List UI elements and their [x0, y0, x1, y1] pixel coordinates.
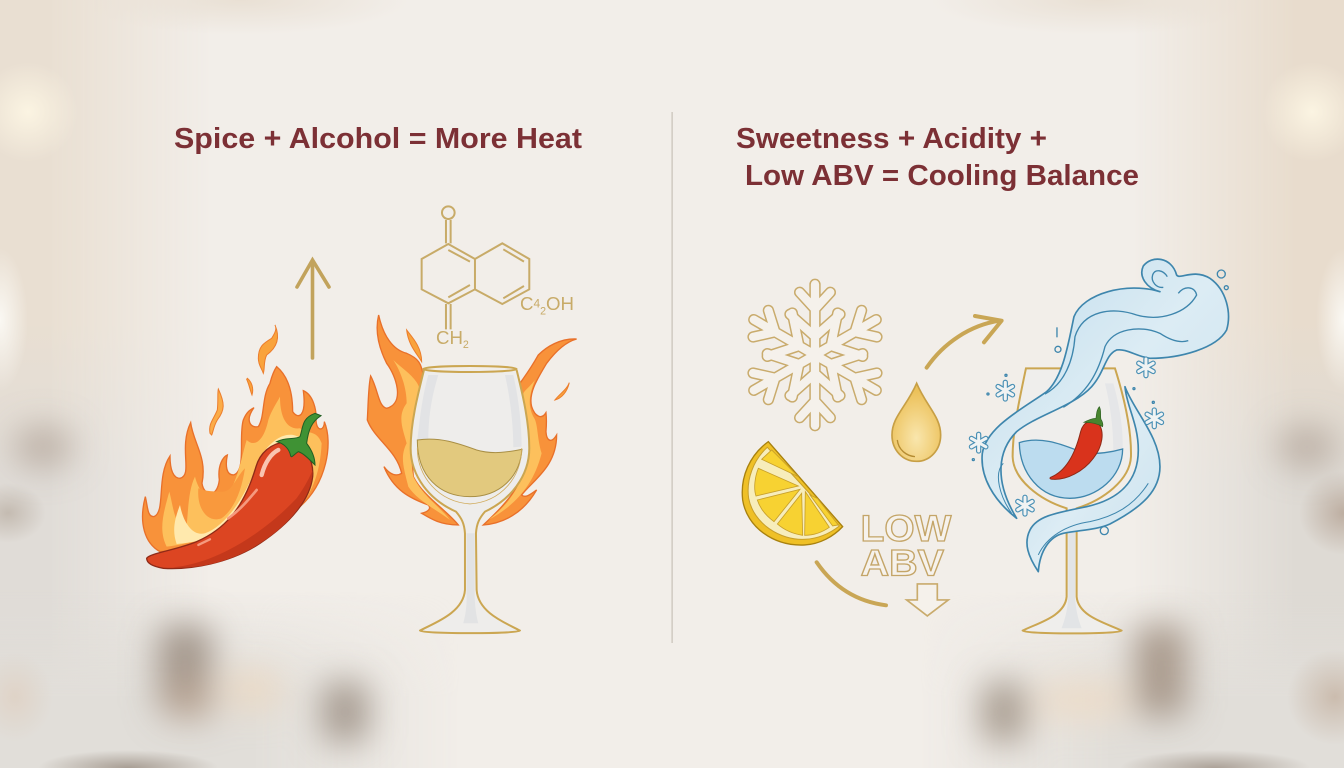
wine glass with flames [367, 315, 577, 633]
flames behind chili [143, 325, 328, 552]
icon: down arrow [907, 584, 948, 616]
chili calyx and stem [277, 413, 321, 465]
molecule diagram: OH [546, 293, 574, 314]
molecule diagram [422, 206, 574, 351]
molecule diagram: CH [436, 327, 463, 348]
low ABV label: ABV [861, 542, 944, 584]
glass [1013, 368, 1131, 633]
icon: snowflake [741, 284, 889, 426]
heading: cooling balance [736, 123, 1139, 192]
heading: cooling balance: Low ABV = Cooling Balance [745, 160, 1139, 192]
arrow: curved connector [817, 562, 886, 605]
molecule diagram: 2 [463, 339, 469, 351]
flames behind glass [367, 315, 577, 525]
arrow: drop to glass [927, 316, 1002, 368]
glass outline [1013, 368, 1131, 633]
glass outline [411, 370, 529, 633]
center divider [672, 112, 673, 643]
heading: cooling balance: Sweetness + Acidity + [736, 123, 1047, 155]
molecule diagram: C [520, 293, 533, 314]
icon: honey drop [892, 383, 941, 461]
icon: up arrow [297, 260, 329, 358]
molecule diagram: 2 [540, 306, 546, 318]
chili with flames [143, 325, 328, 569]
blue water [1019, 440, 1123, 498]
glass bowl [411, 370, 529, 633]
right cluster of ingredients [741, 284, 1002, 616]
cooling wave swirls [982, 259, 1228, 572]
cooling wine glass [971, 259, 1228, 633]
low ABV label: LOW [861, 507, 952, 549]
wine [417, 439, 522, 497]
low ABV label [861, 507, 952, 584]
icon: lemon slice [742, 442, 843, 545]
small snowflakes and bubbles [971, 270, 1228, 535]
heading: spice and alcohol: Spice + Alcohol = More Heat [174, 123, 582, 155]
molecule diagram: 4 [533, 296, 540, 310]
chili body [147, 442, 313, 569]
small chili [1050, 407, 1103, 479]
